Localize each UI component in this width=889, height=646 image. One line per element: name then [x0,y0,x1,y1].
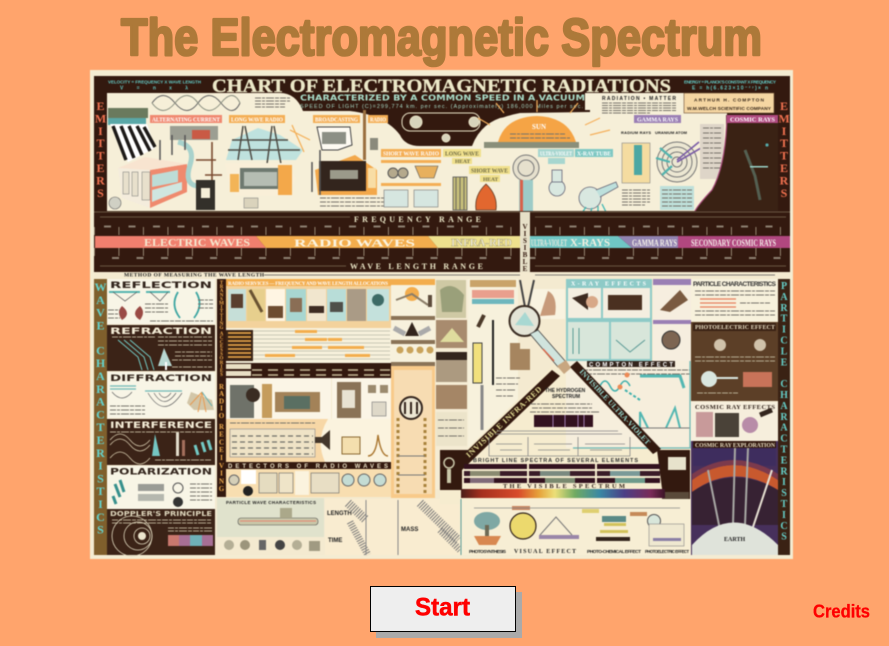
radio receiving column: C [220,340,224,345]
radio receiving column: G [219,485,225,493]
gamma rays band: GAMMA RAYS [632,239,677,249]
panel: compton effect: COMPTON EFFECT [589,362,673,368]
left emitters label: I [98,124,103,138]
panel: doppler's principle: DOPPLER'S PRINCIPLE [110,510,212,518]
icon: eye globe [513,155,539,211]
panel: reflection [107,279,215,324]
band: frequency and wave length scale [226,363,391,378]
label: broadcasting radio: BROADCASTING [315,116,358,124]
wave characteristics column: S [97,523,104,537]
particle characteristics column: S [781,532,787,543]
wave characteristics column: I [98,497,103,511]
visible column: S [523,237,527,245]
panel: interference [107,419,215,465]
visible column: E [523,265,528,273]
energy formula: ENERGY = PLANCK'S CONSTANT X FREQUENCY [684,80,776,84]
wave characteristics column: R [96,382,105,396]
bright line spectra of several elements [464,458,660,484]
table: wave length allocations [226,328,391,363]
particle characteristics column [778,279,790,555]
frequency range label: FREQUENCY RANGE [354,215,481,224]
frequency numbers [104,226,790,228]
label: broadcasting radio [313,115,388,124]
chart heading: CHART OF ELECTROMAGNETIC RADIATIONS [212,76,671,97]
illustration: transmission towers and valley [109,126,222,210]
icon: cathode tube in dark wedge [402,113,480,142]
particle characteristics column: C [780,521,788,532]
particle characteristics column: R [780,466,788,477]
label: radium rays and uranium atom: URANIUM ATOM [655,130,688,135]
label: short wave heat [469,166,510,183]
panel: detectors [226,469,391,497]
panel: cosmic ray effects [691,402,778,441]
visible spectrum rainbow [461,489,665,498]
label: x-ray tube: X-RAY TUBE [577,152,611,158]
start button: Start [415,594,471,622]
secondary cosmic rays band: SECONDARY COSMIC RAYS [691,239,776,249]
triangle: hydrogen spectrum [530,388,600,427]
wave characteristics column: S [97,471,104,485]
radio receiving column: N [220,322,224,327]
panel: cosmic ray effects: COSMIC RAY EFFECTS [695,404,775,411]
panel: infrared thermometer [468,279,530,449]
panel: cosmic ray exploration [691,441,778,555]
triangle: hydrogen spectrum: SPECTRUM [552,394,580,400]
particle characteristics column: R [780,412,788,423]
left emitters label: R [96,173,105,187]
label: long wave radio: LONG WAVE RADIO [231,116,283,124]
right emitters label: M [778,111,790,125]
ultra-violet and x-rays band: ULTRA-VIOLET [531,238,567,248]
sponsor card: Arthur H. Compton [684,93,774,113]
visible column: I [524,244,527,252]
wave characteristics column: C [96,407,105,421]
panel: length, mass and time: MASS [401,527,418,533]
radio receiving column: A [220,332,224,337]
cream illustration field [107,93,727,211]
panel: length, mass and time [325,499,460,555]
energy formula: E = h(6.623×10⁻²⁷)× n [692,86,768,92]
velocity formula [108,80,201,92]
left emitters label: E [96,99,105,113]
radio receiving column: E [219,446,224,454]
radio receiving column: A [220,289,224,294]
secondary cosmic rays band [678,236,790,249]
velocity formula: VELOCITY = FREQUENCY X WAVE LENGTH [108,80,201,84]
panel: x-ray effects [520,279,652,361]
wave length ticks [94,248,790,256]
panel: interference: INTERFERENCE [110,421,212,431]
particle characteristics column: L [781,346,788,357]
panel: refraction [107,325,215,371]
panel: photosynthesis and visual effect strip: PHOTO-CHEMICAL EFFECT [587,549,641,555]
particle characteristics column: T [781,499,788,510]
radio waves band [256,236,438,250]
right emitters label: I [782,124,787,138]
wave characteristics column: W [94,280,106,294]
label: short wave heat: HEAT [483,177,499,183]
visible column: I [524,230,527,238]
wave characteristics column: C [96,510,105,524]
radio receiving column: I [220,470,223,478]
label: gamma rays: GAMMA RAYS [637,116,678,124]
panel: transmitting photos [226,279,391,328]
particle characteristics column: A [780,423,788,434]
top section: emitters [94,76,790,214]
energy formula [684,80,776,92]
panel: particle wave apparatus [217,498,324,555]
panel: photosynthesis and visual effect strip: VISUAL EFFECT [514,549,576,555]
visible column: B [523,251,528,259]
label: radium rays and uranium atom: RADIUM RAYS [621,130,651,135]
radio receiving column: D [219,397,224,405]
sponsor card: Arthur H. Compton: W.M.WELCH SCIENTIFIC COMPANY [687,106,772,112]
particle characteristics column: R [780,303,788,314]
panel: doppler's principle [107,509,215,556]
label: broadcasting radio: RADIO [370,116,386,124]
panel: polarization [107,466,215,509]
radio receiving column: E [220,344,224,349]
right emitters label: E [780,161,788,175]
chart of electromagnetic radiations [90,70,793,559]
radio waves band: RADIO WAVES [294,238,415,250]
panel: compton effect [566,361,691,448]
label: long wave heat: LONG WAVE [445,152,479,158]
bright line spectra of several elements: BRIGHT LINE SPECTRA OF SEVERAL ELEMENTS [473,458,638,464]
panel: photosynthesis and visual effect strip: PHOTOELECTRIC EFFECT [645,549,689,554]
left emitters label: M [95,111,106,125]
wave characteristics column: A [96,293,105,307]
panel: photoelectric effect [691,322,778,401]
radio receiving column: I [221,365,223,370]
wave characteristics column: T [96,420,105,434]
cosmic space panel [695,115,780,211]
panel: photoelectric effect: PHOTOELECTRIC EFFECT [695,325,775,331]
wave length range label: WAVE LENGTH RANGE [350,262,483,271]
particle characteristics column: E [781,455,788,466]
infra-red band: INFRA-RED [451,238,512,249]
radio receiving column: I [220,454,223,462]
particle characteristics column: T [781,314,788,325]
triangle: hydrogen spectrum: THE HYDROGEN [545,388,586,394]
radio receiving column [217,279,226,497]
wave characteristics column: H [96,356,106,370]
radio receiving column: R [219,383,225,391]
radio receiving column: N [220,293,224,298]
speed of light line: SPEED OF LIGHT (C)=299,774 km. per sec. (Approximately) 186,000 Miles per sec. [300,104,583,110]
label: x-ray tube [575,149,613,158]
label: ultra-violet light [538,149,574,164]
central dark wedge with telescope [303,110,590,146]
rays from x-ray tube [582,204,606,214]
electric waves band: ELECTRIC WAVES [144,238,251,249]
label: short wave heat: SHORT WAVE [471,168,508,174]
radio receiving column: N [219,477,224,485]
panel: refraction: REFRACTION [110,327,212,337]
title: The Electromagnetic Spectrum [121,9,762,67]
lower section: wave and particle characteristics [94,272,790,556]
band: invisible infra-red: INVISIBLE INFRA-RED [464,385,544,459]
radio receiving column: R [219,423,225,431]
label: ultra-violet light: ULTRA-VIOLET [540,152,572,158]
visible column: L [523,258,528,266]
illustration: radium apparatus [622,143,650,183]
telescope spectroscope [510,280,571,374]
radio receiving column: I [220,405,223,413]
radio receiving column: S [220,373,223,378]
wave characteristics column: E [96,318,105,332]
panel: photosynthesis and visual effect strip: PHOTOSYNTHESIS [469,549,507,555]
visible column: V [522,223,528,231]
particle characteristics column: T [781,444,788,456]
radio receiving column: E [219,431,224,439]
wave characteristics column: C [96,343,105,357]
chart paper [90,70,793,559]
right dark block with instrument [657,450,690,504]
illustration: dam and power plant [108,108,187,208]
particle characteristics column: S [781,488,787,499]
electric waves band [95,236,266,249]
particle characteristics column: C [780,336,788,346]
radio receiving column: S [220,348,223,354]
infra-red band [428,236,520,249]
wave characteristics column: E [96,433,105,447]
cream arc under the sun [475,112,590,150]
header dark background [94,76,790,211]
particle characteristics column: A [780,401,788,412]
radio receiving column: T [220,281,224,286]
wave characteristics column: A [96,369,105,383]
label: long wave heat: HEAT [455,159,471,165]
wave characteristics column [94,279,107,555]
icon: ultra-violet lamp and x-ray tube [549,170,618,209]
panel: particle characteristics: PARTICLE CHARACTERISTICS [693,281,777,288]
sponsor card: Arthur H. Compton: ARTHUR H. COMPTON [694,98,765,104]
panel: cosmic ray exploration: EARTH [724,537,745,543]
chart subheading: CHARACTERIZED BY A COMMON SPEED IN A VACUUM [300,94,585,102]
illustration: broadcasting station [312,110,388,206]
panel: length, mass and time: TIME [328,538,342,544]
band: invisible ultra-violet: INVISIBLE ULTRA-VIOLET [578,367,652,446]
credits link: Credits [813,602,870,622]
radio receiving column: R [220,285,224,290]
icon: radiator [453,177,467,210]
panel: photosynthesis and visual effect strip [460,499,691,555]
radio receiving column: I [221,318,223,323]
the visible spectrum heading: THE VISIBLE SPECTRUM [503,483,625,490]
radio receiving column: M [219,302,224,306]
panel: radio tube diagram [391,366,435,498]
sun dome [478,100,610,148]
panel: radiographs [653,279,691,362]
radio receiving column: C [219,438,224,446]
label: cosmic rays: COSMIC RAYS [730,116,775,124]
panel: prisms and light sources [391,279,435,366]
icon: fire [476,184,496,210]
text block: emanations [622,124,724,210]
radio receiving column: T [220,310,224,315]
radio receiving column: O [220,357,224,362]
text block: radiation and matter [602,96,676,113]
velocity formula: V = n x λ [120,86,188,92]
lower paper [94,272,790,555]
illustration: uranium atom [656,142,701,182]
right emitters label: T [780,149,788,163]
band: invisible infra-red [440,370,560,490]
panel: transmitting photos: RADIO SERVICES — FREQUENCY AND WAVE LENGTH ALLOCATIONS [228,282,388,287]
ultra-violet and x-rays band: X-RAYS [570,238,610,249]
text block: radiation and matter: RADIATION • MATTER [602,96,676,102]
ultra-violet and x-rays band [530,236,632,249]
right emitters label: T [780,136,788,150]
radio receiving column: C [220,336,224,341]
wave characteristics column: R [96,446,105,460]
label: short wave radio: SHORT WAVE RADIO [383,150,439,158]
panel: television receiver [332,378,391,419]
label: alternating current: ALTERNATING CURRENT [152,116,221,124]
right emitters label: S [781,186,788,200]
wave characteristics column: V [96,306,105,320]
visible column [520,212,530,273]
panel: radio tuned circuit [226,419,391,462]
left emitters label: S [97,186,104,200]
wave characteristics column: A [96,395,105,409]
wave characteristics column: T [96,484,105,498]
panel: reflection: REFLECTION [110,281,212,291]
particle characteristics column: I [782,510,786,521]
spectrum band: frequency and wave length ranges [94,211,790,273]
panel: diffraction [107,372,215,418]
band background [94,211,790,272]
detectors of radio waves heading: DETECTORS OF RADIO WAVES [228,464,388,470]
start button [370,586,522,638]
triangle: magnetic effects [489,431,630,456]
radio receiving column: I [221,306,223,311]
panel: cosmic ray exploration: COSMIC RAY EXPLORATION [695,443,776,449]
left emitters label: T [96,149,105,163]
radio receiving column: S [220,353,223,358]
right emitters label: R [780,173,789,187]
particle characteristics column: C [780,434,788,445]
wave characteristics column: I [98,459,103,473]
particle characteristics column: E [781,357,788,368]
illustration: short wave radio oscillators [381,160,441,207]
radio receiving column: E [220,369,224,374]
particle characteristics column: H [780,390,788,401]
particle characteristics column: C [780,379,788,390]
panel: length, mass and time: LENGTH [327,511,352,517]
wave diagram [152,96,290,110]
panel: particle characteristics [691,279,778,321]
panel: x-ray effects: X-RAY EFFECTS [571,282,647,288]
particle characteristics column: I [782,477,786,488]
radio receiving column: A [219,390,224,398]
method of measuring strip: METHOD OF MEASURING THE WAVE LENGTH [124,272,265,278]
radio receiving column: S [220,297,223,302]
wave length numbers [112,257,790,259]
left emitters label: T [96,136,105,150]
panel: receiver with listener [226,378,331,419]
radio receiving column: G [220,326,224,331]
label: radium rays and uranium atom [621,130,688,135]
particle characteristics column: A [780,292,788,303]
panel: polarization: POLARIZATION [110,468,212,478]
radio receiving column: R [220,361,224,366]
photo column [435,279,468,489]
range rules [94,212,790,266]
radio receiving column: V [219,462,224,470]
illustration: long wave radio station [225,125,310,208]
radio receiving column: T [220,314,224,319]
radio receiving column: O [219,412,225,420]
label: long wave heat [443,149,481,165]
left emitters label: E [96,161,105,175]
gamma rays band [618,236,678,249]
particle characteristics column: I [782,325,786,336]
right emitters label: E [780,99,788,113]
panel: diffraction: DIFFRACTION [110,374,212,384]
prism assembly [440,363,690,504]
particle characteristics column: P [781,281,787,292]
sun dome: SUN [532,123,546,131]
panel: particle wave apparatus: PARTICLE WAVE CHARACTERISTICS [226,500,316,505]
frequency ticks [94,227,790,235]
